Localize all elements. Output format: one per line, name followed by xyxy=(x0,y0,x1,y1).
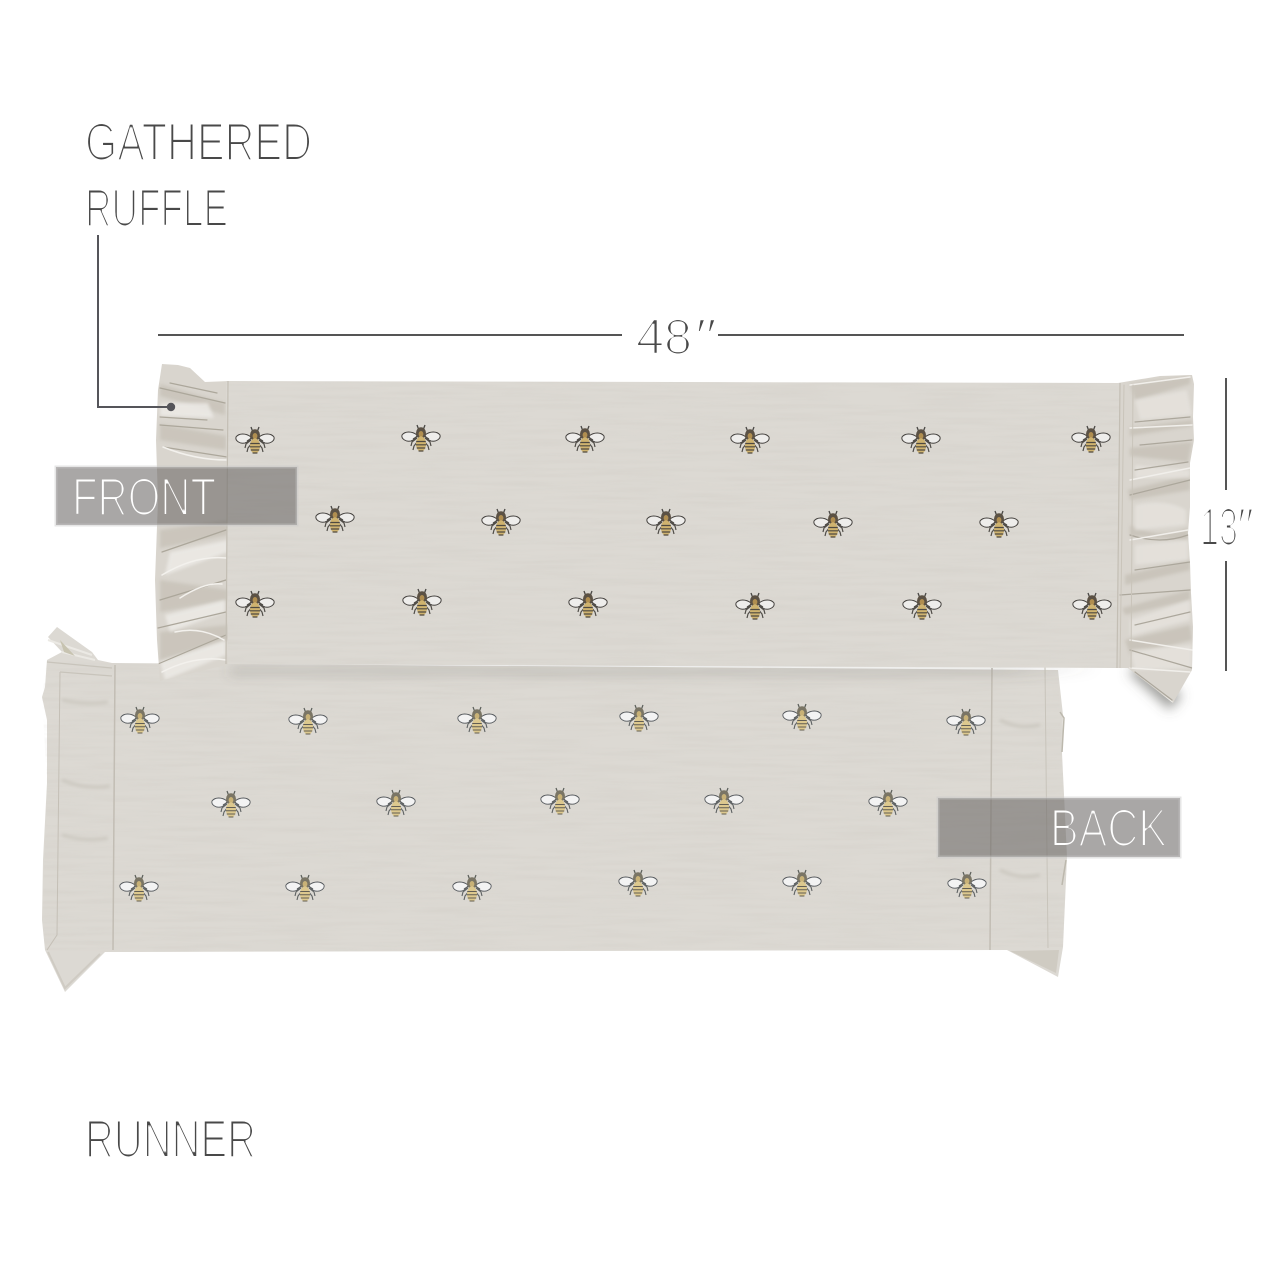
width dimension: 48 inches xyxy=(158,309,1184,365)
height dimension: 13 inches: 13 xyxy=(1200,498,1238,557)
width dimension: 48 inches: ″ xyxy=(695,309,717,365)
heading: gathered ruffle: GATHERED xyxy=(85,113,312,172)
left gathered ruffle xyxy=(155,364,228,678)
front runner edges xyxy=(226,381,1120,668)
width dimension: 48 inches: 48 xyxy=(636,309,692,365)
panel: back of runner xyxy=(42,627,1067,992)
back runner weave texture xyxy=(42,660,1067,952)
label: front: FRONT xyxy=(72,468,216,527)
back runner bee pattern xyxy=(120,704,986,902)
height dimension: 13 inches xyxy=(1200,378,1254,671)
front runner weave texture xyxy=(226,381,1120,668)
front runner bee pattern xyxy=(236,425,1111,620)
height dimension: 13 inches: ″ xyxy=(1237,498,1254,557)
label: back: BACK xyxy=(1050,799,1167,858)
leader line from ruffle label xyxy=(98,235,175,411)
front runner fabric body xyxy=(226,381,1120,668)
right gathered ruffle xyxy=(1118,375,1194,703)
heading: gathered ruffle xyxy=(85,113,312,238)
product name: runner: RUNNER xyxy=(85,1110,256,1169)
panel: front of runner xyxy=(150,360,1200,710)
back runner hem and seams xyxy=(47,640,1066,988)
label: back xyxy=(938,798,1180,858)
back runner fabric xyxy=(42,627,1067,992)
heading: gathered ruffle: RUFFLE xyxy=(85,179,228,238)
front runner shadow xyxy=(230,665,1182,710)
